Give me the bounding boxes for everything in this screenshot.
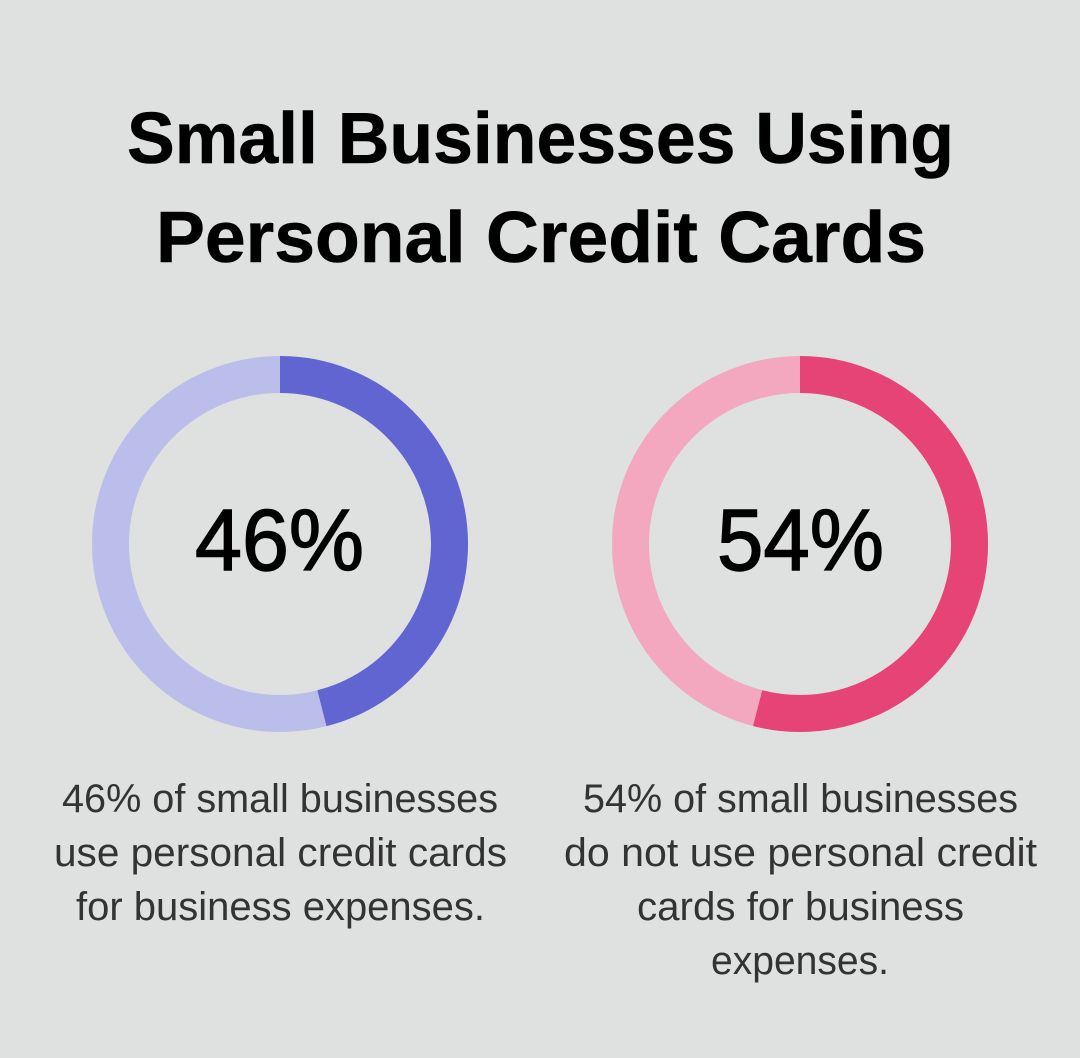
panel: 54% do not use personal credit cards — [564, 374, 1037, 983]
description: 46% — [54, 777, 507, 929]
description: 54%: cards for business — [637, 885, 964, 929]
donut chart: 46% — [110, 374, 450, 714]
stat: 54%: 54% — [717, 492, 884, 589]
description: 46%: use personal credit cards — [54, 831, 507, 875]
description: 54% — [564, 777, 1037, 983]
description: 54%: do not use personal credit — [564, 831, 1037, 875]
description: 54%: expenses. — [711, 939, 889, 983]
stat: 46%: 46% — [195, 492, 364, 589]
title: Personal Credit Cards — [156, 198, 926, 278]
title: Small Businesses Using — [127, 99, 954, 179]
description: 46%: 46% of small businesses — [62, 777, 498, 821]
description: 54%: 54% of small businesses — [583, 777, 1018, 821]
panel: 46% use personal credit cards — [54, 374, 507, 929]
donut chart: 54% — [630, 374, 970, 714]
title — [127, 99, 954, 278]
description: 46%: for business expenses. — [76, 885, 485, 929]
